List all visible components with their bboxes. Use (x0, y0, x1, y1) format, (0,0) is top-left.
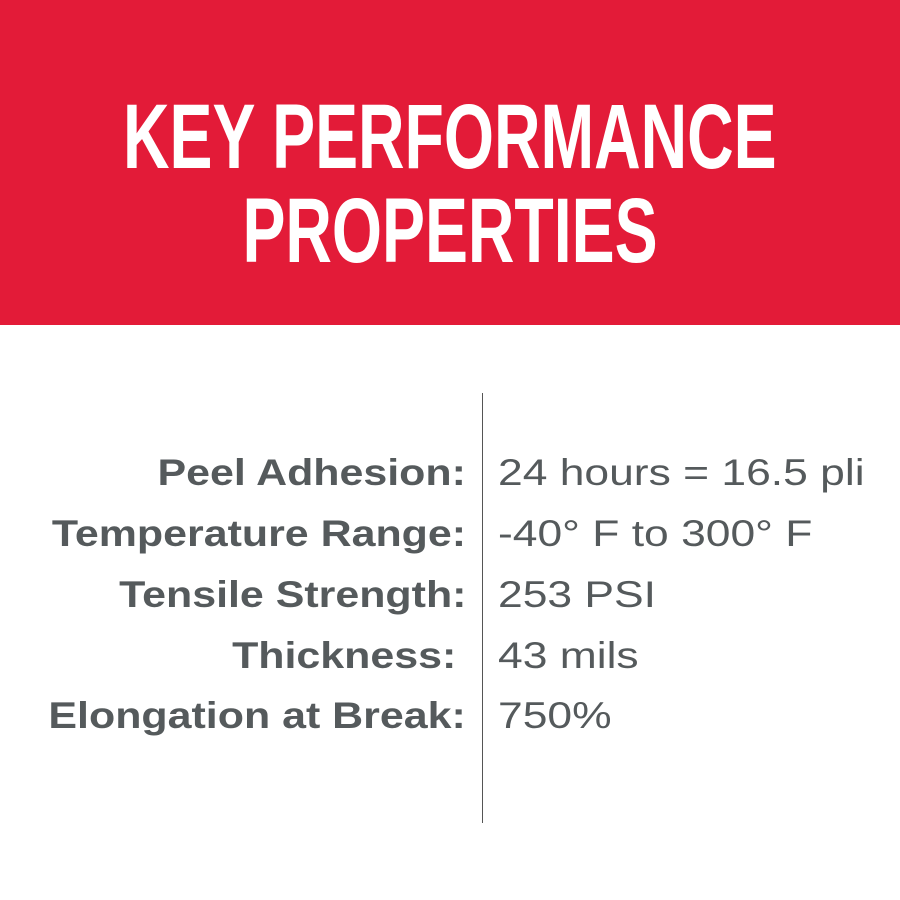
row: peel adhesion (158, 452, 865, 493)
row: thickness: Thickness: (232, 635, 456, 676)
row: temperature range: Temperature Range: (52, 513, 466, 554)
row: temperature range (52, 513, 812, 554)
header band (0, 0, 900, 325)
divider line (482, 393, 483, 823)
row: peel adhesion: Peel Adhesion: (158, 452, 466, 493)
row: thickness: 43 mils (498, 635, 639, 676)
row: peel adhesion: 24 hours = 16.5 pli (498, 452, 865, 493)
row: tensile strength (119, 574, 656, 615)
row: temperature range: -40° F to 300° F (498, 513, 812, 554)
row: tensile strength: 253 PSI (498, 574, 656, 615)
row: tensile strength: Tensile Strength: (119, 574, 466, 615)
row: elongation: Elongation at Break: (49, 695, 466, 736)
row: elongation: 750% (498, 695, 612, 736)
row: thickness (232, 635, 639, 676)
title line 2: PROPERTIES (242, 180, 658, 282)
properties table (49, 452, 865, 736)
title line 1: KEY PERFORMANCE (123, 86, 777, 188)
